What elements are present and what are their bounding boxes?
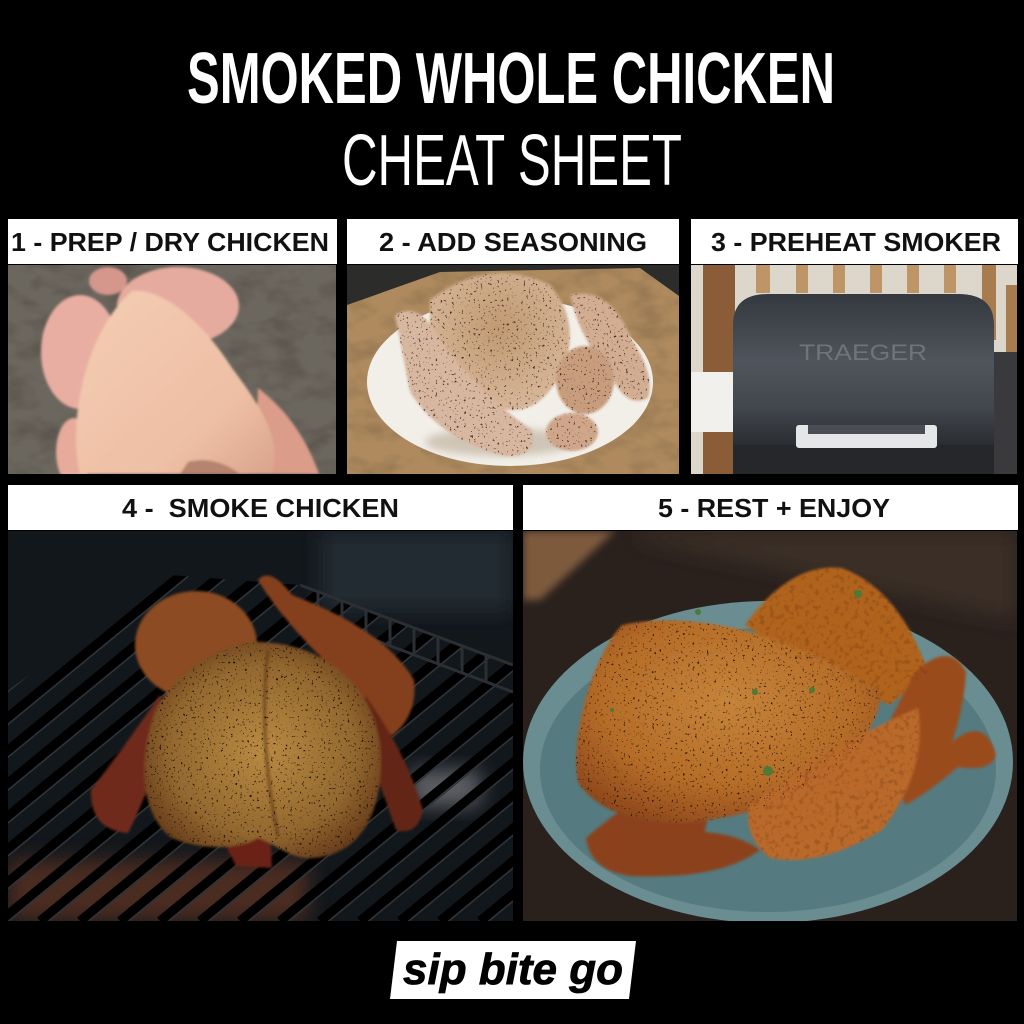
step 2 heading: [347, 219, 679, 264]
logo: sip bite go: sip bite go: [403, 945, 623, 994]
panel: step 5 rest and enjoy: [523, 485, 1018, 923]
step 5 photo: finished chicken on blue plate: [523, 531, 1017, 923]
step 3 heading: [691, 219, 1018, 264]
step 1 heading: [8, 219, 337, 264]
step 5 heading: [523, 485, 1018, 530]
panel: step 3 preheat smoker: [691, 219, 1018, 474]
icon: smoker lid: TRAEGER: [799, 340, 927, 365]
step 4 heading: [8, 485, 513, 530]
title: CHEAT SHEET: [342, 121, 682, 201]
icon: smoker lid: [733, 294, 994, 474]
step 4 heading: 4 - SMOKE CHICKEN: [122, 493, 399, 523]
title: [187, 39, 835, 201]
step 2 heading: 2 - ADD SEASONING: [379, 227, 647, 257]
grate rear rail: [300, 585, 513, 692]
step 5 heading: 5 - REST + ENJOY: [658, 493, 890, 523]
panel: step 1 prep / dry chicken: [8, 219, 337, 486]
panel: step 4 smoke chicken: [8, 485, 513, 921]
roasted chicken: [576, 567, 996, 876]
step 2 photo: seasoned chicken on plate: [347, 265, 679, 474]
step 1 photo: raw chicken: [8, 265, 336, 486]
step 1 heading: 1 - PREP / DRY CHICKEN: [11, 227, 329, 257]
step 3 photo: smoker grill: [691, 265, 1017, 474]
smoked chicken: [91, 575, 423, 868]
step 3 heading: 3 - PREHEAT SMOKER: [711, 227, 1001, 257]
panel: step 2 add seasoning: [347, 219, 679, 474]
step 4 photo: chicken on grill grate: [8, 531, 513, 921]
